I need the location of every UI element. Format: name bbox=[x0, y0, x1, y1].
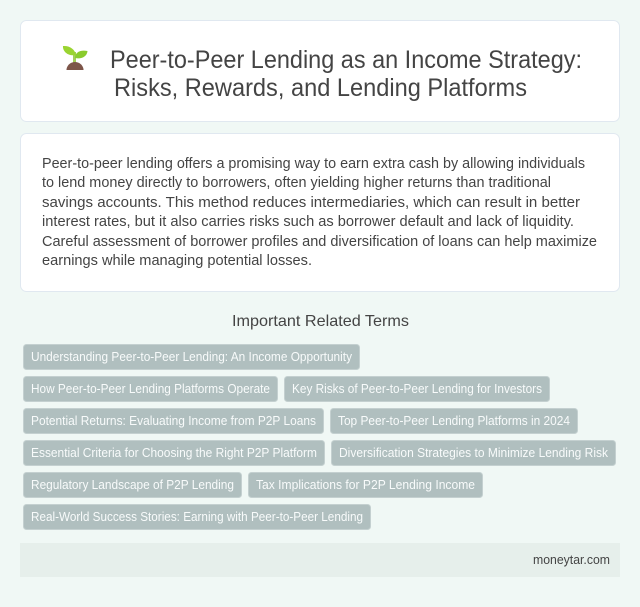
tag 6: Essential Criteria for Choosing the Right P2P Platform bbox=[31, 445, 317, 460]
tag 6 bbox=[24, 440, 324, 466]
heading: important related terms: Important Related Terms bbox=[232, 313, 409, 330]
description text: to lend money directly to borrowers, often yielding higher returns than traditional bbox=[42, 174, 551, 191]
title text: Risks, Rewards, and Lending Platforms bbox=[114, 74, 527, 102]
tag 10: Real-World Success Stories: Earning with Peer-to-Peer Lending bbox=[31, 509, 363, 524]
tag 3 bbox=[284, 376, 550, 402]
tag 7: Diversification Strategies to Minimize Lending Risk bbox=[339, 445, 609, 460]
tag 2 bbox=[24, 376, 278, 402]
footer bbox=[20, 543, 620, 577]
title text bbox=[110, 46, 582, 102]
tag 5: Top Peer-to-Peer Lending Platforms in 2024 bbox=[338, 413, 570, 428]
tag 9 bbox=[248, 472, 482, 498]
tag 2: How Peer-to-Peer Lending Platforms Operate bbox=[31, 381, 270, 396]
icon: seedling bbox=[63, 46, 88, 70]
title text: Peer-to-Peer Lending as an Income Strategy: bbox=[110, 46, 582, 74]
tag 4 bbox=[24, 408, 324, 434]
description text: earnings while managing potential losses. bbox=[42, 252, 312, 269]
tag list bbox=[24, 344, 616, 530]
tag 5 bbox=[330, 408, 578, 434]
description text: interest rates, but it also carries risks such as borrower default and lack of liquidity. bbox=[42, 213, 574, 230]
tag 8: Regulatory Landscape of P2P Lending bbox=[31, 477, 234, 492]
description text: Peer-to-peer lending offers a promising way to earn extra cash by allowing individuals bbox=[42, 155, 585, 172]
tag 3: Key Risks of Peer-to-Peer Lending for Investors bbox=[292, 381, 542, 396]
tag 1 bbox=[24, 344, 360, 370]
tag 10 bbox=[24, 504, 370, 530]
description text bbox=[42, 155, 597, 269]
tag 4: Potential Returns: Evaluating Income from P2P Loans bbox=[31, 413, 316, 428]
tag 1: Understanding Peer-to-Peer Lending: An Income Opportunity bbox=[31, 349, 353, 364]
description text: Careful assessment of borrower profiles and diversification of loans can help maximize bbox=[42, 233, 597, 250]
tag 8 bbox=[24, 472, 242, 498]
panel: title card bbox=[20, 20, 620, 122]
tag 7 bbox=[332, 440, 616, 466]
description text: savings accounts. This method reduces intermediaries, which can result in better bbox=[42, 194, 580, 211]
tag 9: Tax Implications for P2P Lending Income bbox=[256, 477, 475, 492]
footer site name: moneytar.com bbox=[533, 552, 610, 567]
panel: description bbox=[20, 134, 620, 292]
